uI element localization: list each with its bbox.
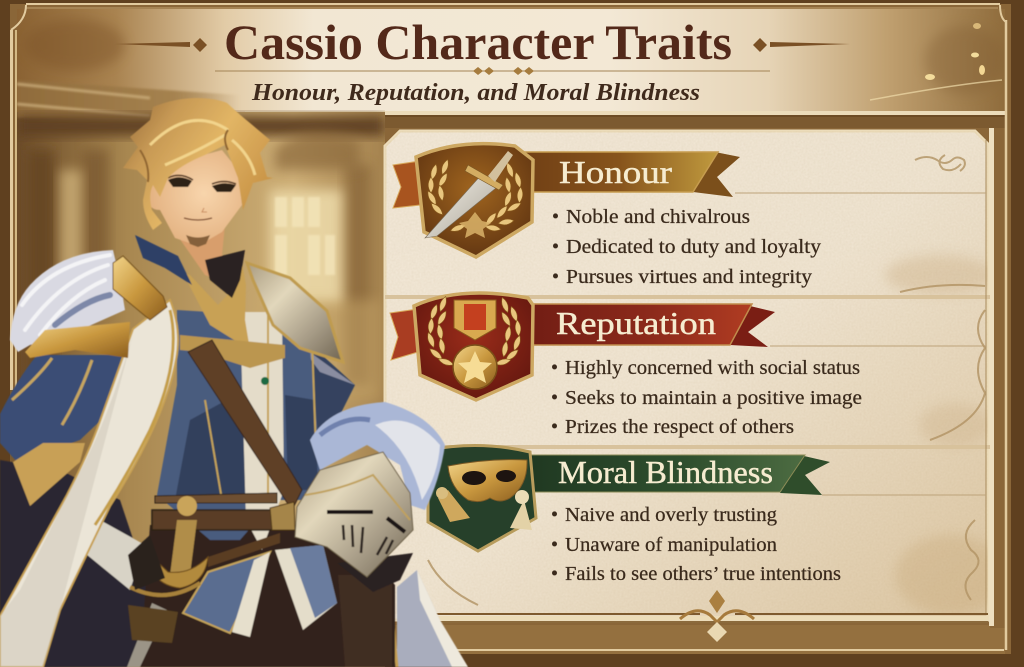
- traits: Reputation: Highly concerned with social status: [565, 357, 860, 379]
- subtitle: Honour, Reputation, and Moral Blindness: [251, 80, 700, 106]
- traits: Honour: Noble and chivalrous: [566, 206, 750, 228]
- traits: Reputation: [551, 357, 862, 438]
- traits: Moral Blindness: Naive and overly trusting: [565, 504, 777, 526]
- title flourish left: [115, 38, 207, 52]
- necklace gem: [261, 377, 269, 385]
- section: Honour: [393, 144, 821, 288]
- right sleeve: [280, 335, 355, 500]
- cape: left white: [0, 300, 178, 667]
- traits: Reputation: Prizes the respect of others: [565, 416, 794, 438]
- pauldron: left gold: [113, 256, 167, 320]
- strap: [188, 340, 302, 510]
- clasp: [180, 335, 285, 368]
- traits: Honour: •: [552, 266, 559, 288]
- traits: Honour: Dedicated to duty and loyalty: [566, 236, 821, 258]
- traits: Moral Blindness: Fails to see others’ true intentions: [565, 563, 841, 585]
- traits: Moral Blindness: Unaware of manipulation: [565, 534, 777, 556]
- cuff: gold: [13, 443, 85, 506]
- trousers: [140, 525, 395, 667]
- doublet skirt: [183, 552, 270, 633]
- pauldron: right silver: [247, 263, 343, 362]
- hair: [123, 98, 273, 230]
- helmet: [295, 452, 413, 592]
- band: shoulder gold: [25, 322, 130, 358]
- traits: Moral Blindness: •: [551, 534, 558, 556]
- title: Cassio Character Traits: [224, 14, 732, 70]
- torso: [157, 310, 322, 540]
- banner: Honour: [393, 152, 740, 208]
- section: Reputation: [390, 293, 862, 438]
- neck: [170, 225, 232, 285]
- ornament: bottom flourish: [680, 590, 754, 642]
- traits: Honour: Pursues virtues and integrity: [566, 266, 812, 288]
- heading: Reputation: Reputation: [556, 305, 716, 341]
- collar: [135, 235, 250, 350]
- heading: Moral Blindness: Moral Blindness: [558, 454, 773, 490]
- head: [123, 98, 273, 247]
- traits: Honour: [552, 206, 821, 288]
- header divider ornament: [473, 67, 534, 75]
- icon: mask shield: [428, 445, 536, 551]
- traits: Honour: •: [552, 236, 559, 258]
- helmet plume: [310, 402, 445, 510]
- cape: right lower: [397, 570, 468, 667]
- panel: parchment: [385, 128, 1005, 626]
- traits: Reputation: •: [551, 357, 558, 379]
- belts: [152, 493, 295, 567]
- heading: Honour: Honour: [559, 154, 672, 190]
- traits: Moral Blindness: •: [551, 563, 558, 585]
- sword: [127, 496, 208, 667]
- traits: Moral Blindness: •: [551, 504, 558, 526]
- traits: Moral Blindness: [551, 504, 841, 585]
- cape: dark back: [0, 450, 400, 667]
- feather: shoulder: [10, 250, 125, 352]
- glove: [128, 535, 165, 590]
- traits: Honour: •: [552, 206, 559, 228]
- title flourish right: [753, 38, 850, 52]
- section: Moral Blindness: [428, 445, 841, 585]
- traits: Reputation: Seeks to maintain a positive image: [565, 387, 862, 409]
- white undersleeve: [75, 520, 145, 590]
- panel ornaments: [428, 155, 985, 605]
- character: Cassio: [0, 98, 468, 667]
- icon: medal shield: [414, 293, 533, 400]
- banner: Moral Blindness: [510, 455, 830, 495]
- banner: Reputation: [390, 304, 775, 360]
- traits: Reputation: •: [551, 416, 558, 438]
- sleeve: left arm: [0, 355, 127, 462]
- icon: sword shield: [416, 144, 533, 257]
- traits: Reputation: •: [551, 387, 558, 409]
- header band: [17, 9, 1005, 128]
